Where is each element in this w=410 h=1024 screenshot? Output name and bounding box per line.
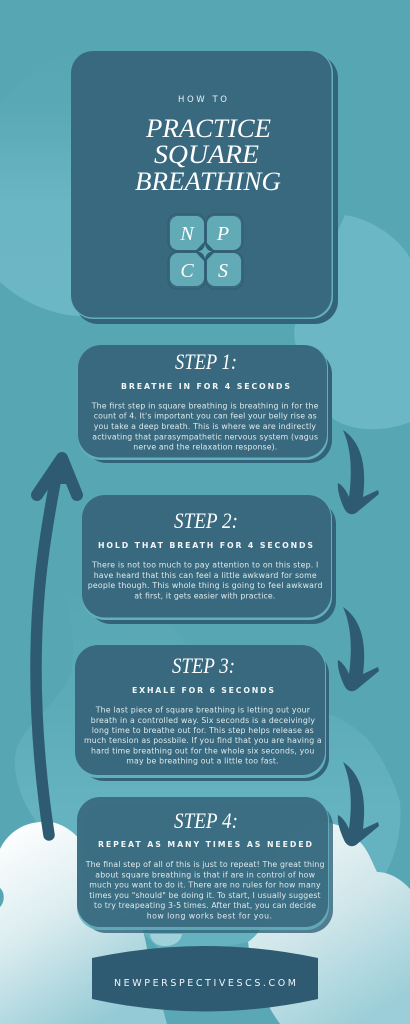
step 4 body	[85, 860, 324, 920]
step 4 body: to try treapeating 3-5 times. After that, you can decide	[94, 901, 316, 910]
step 4 body: The final step of all of this is just to repeat! The great thing	[85, 860, 324, 869]
step 4 heading: STEP 4:	[174, 808, 238, 833]
step 3 body: much tension as possbile. If you find that you are having a	[84, 736, 322, 745]
step 4 body: much you want to do it. There are no rules for how many	[89, 880, 321, 890]
step 1 body	[91, 402, 319, 452]
panel: step 4	[77, 797, 333, 933]
step 3 body: hard time breathing out for the whole six seconds, you	[91, 746, 314, 756]
website url: NEWPERSPECTIVESCS.COM	[114, 978, 296, 989]
step 2 body	[88, 560, 322, 600]
step 3 body: The last piece of square breathing is letting out your	[95, 706, 311, 714]
step 3 body: may be breathing out a little too fast.	[126, 756, 279, 766]
step 1 subheading: BREATHE IN FOR 4 SECONDS	[121, 382, 290, 391]
arrow: step 1 to step 2	[338, 430, 379, 514]
step 4 body: about square breathing is that if are in control of how	[95, 870, 316, 880]
main title	[135, 114, 281, 196]
step 3 subheading: EXHALE FOR 6 SECONDS	[132, 686, 274, 695]
NPCS logo: N	[179, 223, 195, 245]
arrow: step 3 to step 4	[338, 762, 379, 846]
loop arrow going up	[36, 455, 77, 835]
clouds	[0, 822, 410, 1024]
step 3 heading: STEP 3:	[172, 653, 235, 678]
main title: SQUARE	[154, 140, 259, 169]
step 1 body: nerve and the relaxation response).	[133, 443, 277, 452]
step 3 body: long time to breathe out for. This step helps release as	[92, 726, 314, 735]
kicker: how to: HOW TO	[178, 95, 227, 105]
main title: PRACTICE	[145, 114, 271, 143]
step 1 body: count of 4. It's important you can feel your belly rise as	[94, 412, 317, 421]
step 1 body: activating that parasympathetic nervous system (vagus	[92, 432, 318, 441]
footer banner	[92, 946, 318, 1012]
step 2 body: have heard that this can feel a little awkward for some	[94, 571, 317, 580]
NPCS logo: C	[180, 260, 194, 282]
step 1 body: you take a deep breath. This is where we are indirectly	[94, 422, 316, 431]
NPCS logo: S	[218, 260, 228, 282]
step 1 body: The first step in square breathing is breathing in for the	[91, 402, 319, 410]
step 2 body: There is not too much to pay attention to on this step. I	[91, 560, 318, 570]
NPCS logo	[168, 214, 243, 289]
step 2 body: people though. This whole thing is going to feel awkward	[88, 581, 322, 590]
panel: step 2	[82, 495, 336, 624]
panel: step 3	[75, 645, 329, 781]
step 3 body	[84, 706, 322, 766]
step 4 body: how long works best for you.	[147, 912, 272, 920]
NPCS logo: P	[216, 223, 229, 245]
step 4 body: times you "should" be doing it. To start, I usually suggest	[89, 891, 321, 900]
arrow: step 2 to step 3	[338, 607, 379, 691]
step 2 body: at first, it gets easier with practice.	[134, 592, 275, 600]
step 3 body: breath in a controlled way. Six seconds is a deceivingly	[91, 716, 315, 725]
step 2 heading: STEP 2:	[174, 508, 238, 533]
step 2 subheading: HOLD THAT BREATH FOR 4 SECONDS	[98, 541, 313, 550]
panel: step 1	[78, 345, 332, 463]
step 1 heading: STEP 1:	[175, 349, 237, 374]
step 4 subheading: REPEAT AS MANY TIMES AS NEEDED	[98, 840, 313, 849]
main title: BREATHING	[135, 167, 281, 196]
title panel	[71, 51, 338, 324]
